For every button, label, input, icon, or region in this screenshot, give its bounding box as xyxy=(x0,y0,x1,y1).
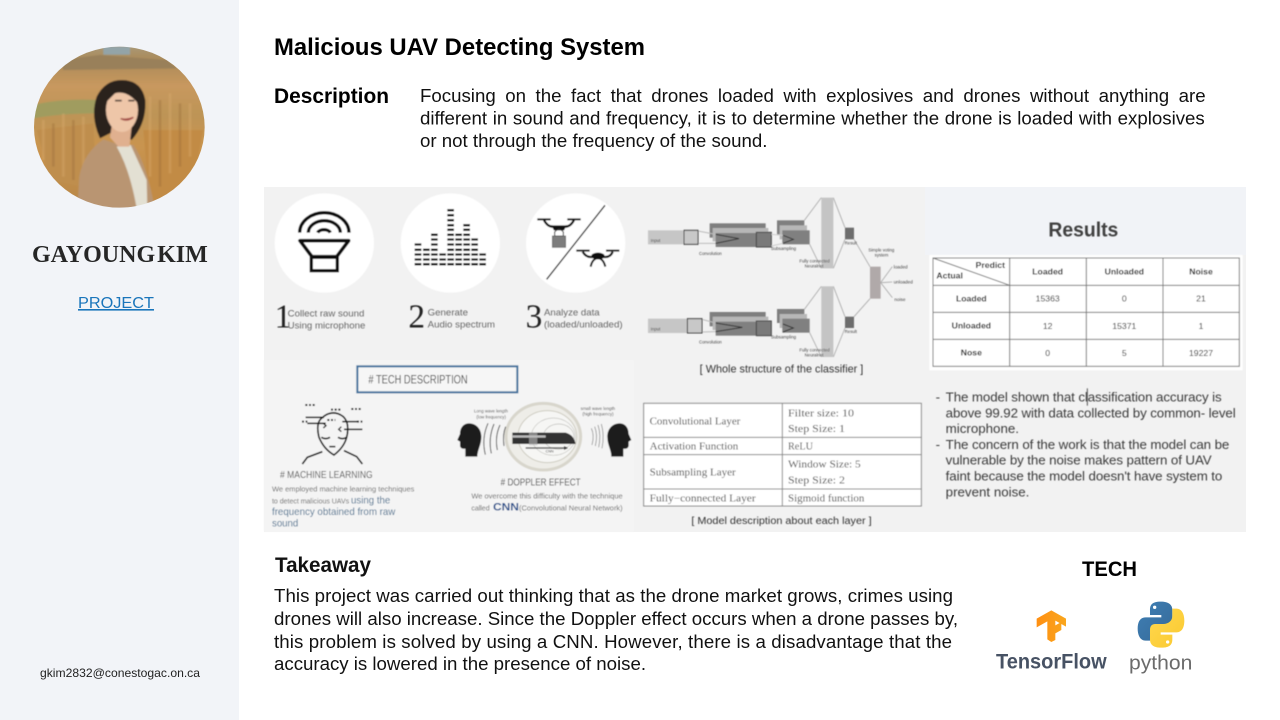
step labels: 3 xyxy=(526,298,542,335)
results heading: Results xyxy=(1048,220,1118,242)
upper branch xyxy=(648,198,854,268)
panel: figures xyxy=(264,187,1246,532)
results notes xyxy=(936,388,1236,499)
confusion matrix: Unloaded xyxy=(952,321,991,331)
results notes: - xyxy=(936,437,940,452)
description text: Focusing on the fact that drones loaded with explosives and drones without anything are xyxy=(420,85,1206,106)
takeaway text: This project was carried out thinking that as the drone market grows, crimes using xyxy=(274,585,953,606)
diagram labels: Subsampling xyxy=(771,334,797,339)
step labels: 2 xyxy=(408,298,425,335)
diagram labels: Fully connected xyxy=(799,259,830,264)
machine learning text: to detect malicious UAVs using the xyxy=(272,495,390,506)
confusion matrix: 19227 xyxy=(1189,348,1213,358)
layer table: Window Size: 5 xyxy=(788,460,861,471)
left head xyxy=(457,423,481,457)
icon: doppler effect: (low frequency) xyxy=(476,414,506,419)
icon: machine learning head xyxy=(302,405,362,464)
neck xyxy=(110,127,132,147)
diagram labels: Convolution xyxy=(699,340,722,345)
results notes: above 99.92 with data collected by common- level xyxy=(946,405,1236,420)
doppler text: # DOPPLER EFFECT xyxy=(501,477,581,488)
icon: doppler effect: CNN xyxy=(546,450,554,454)
confusion matrix: 12 xyxy=(1043,321,1053,331)
diagram labels: system xyxy=(875,253,889,258)
confusion matrix xyxy=(929,255,1243,370)
diagram labels: Fully connected xyxy=(799,347,830,352)
step labels: 1 xyxy=(275,298,291,335)
confusion matrix: 0 xyxy=(1045,348,1050,358)
diagram labels: noise xyxy=(894,297,906,302)
takeaway heading: Takeaway xyxy=(275,553,371,577)
confusion matrix: Loaded xyxy=(1032,267,1063,277)
icon: python logo xyxy=(1129,602,1192,674)
confusion matrix: Noise xyxy=(1189,267,1213,277)
machine learning text xyxy=(272,470,415,530)
diagram labels: unloaded xyxy=(894,280,913,285)
diagram labels: Neuralnet xyxy=(805,264,824,269)
results notes: - xyxy=(936,390,940,405)
machine learning text: sound xyxy=(272,519,298,530)
icon: doppler effect: small wave length xyxy=(581,406,616,411)
results notes: The concern of the work is that the model can be xyxy=(946,437,1229,452)
description text: different in sound and frequency, it is to determine whether the drone is loaded with explosives xyxy=(420,108,1205,128)
email: gkim2832@conestogac.on.ca xyxy=(40,666,200,680)
tech description box: # TECH DESCRIPTION xyxy=(368,373,468,387)
step 3 drones icon xyxy=(526,193,625,293)
right head xyxy=(607,423,631,457)
machine learning text: # MACHINE LEARNING xyxy=(280,470,373,481)
doppler text: CNN xyxy=(493,502,519,514)
doppler text: (Convolutional Neural Network) xyxy=(519,505,623,512)
layer table: Filter size: 10 xyxy=(788,408,854,419)
icon: doppler effect xyxy=(457,403,631,470)
confusion matrix: 5 xyxy=(1122,348,1127,358)
layer table xyxy=(644,403,921,506)
panel: model layer table xyxy=(644,403,921,527)
confusion matrix: Predict xyxy=(976,260,1005,270)
doppler text xyxy=(471,477,623,514)
layer table: Step Size: 1 xyxy=(788,424,845,435)
tech heading: TECH xyxy=(1082,557,1137,581)
layer table: Activation Function xyxy=(650,442,738,453)
cardigan xyxy=(77,139,155,210)
diagram labels: Input xyxy=(651,326,661,331)
diagram labels: Input xyxy=(651,238,661,243)
icon: doppler effect: (high frequency) xyxy=(582,411,614,416)
layer table: Subsampling Layer xyxy=(650,468,736,479)
title: Malicious UAV Detecting System xyxy=(274,34,645,61)
layer table: Fully−connected Layer xyxy=(650,493,756,504)
description text: or not through the frequency of the sound. xyxy=(420,130,767,151)
machine learning text: We employed machine learning techniques xyxy=(272,487,415,494)
layer table: ReLU xyxy=(788,442,813,453)
results notes: The model shown that classification accuracy is xyxy=(946,390,1222,405)
diagram labels: Simple voting xyxy=(868,247,895,252)
results notes: microphone. xyxy=(946,421,1019,436)
confusion matrix: Unloaded xyxy=(1105,267,1144,277)
confusion matrix: Nose xyxy=(961,348,982,358)
confusion matrix: 1 xyxy=(1199,321,1204,331)
lower branch xyxy=(648,286,854,357)
confusion matrix: 21 xyxy=(1196,294,1206,304)
machine learning text: frequency obtained from raw xyxy=(272,507,395,518)
confusion matrix: 15363 xyxy=(1036,294,1060,304)
step labels xyxy=(275,298,623,335)
face xyxy=(106,88,138,132)
icon: doppler effect: Long wave length xyxy=(474,409,509,414)
doppler text: We overcome this difficulty with the technique xyxy=(471,493,623,501)
panel: process steps xyxy=(275,193,625,335)
panel: results xyxy=(929,220,1243,370)
step labels: (loaded/unloaded) xyxy=(544,320,623,330)
project link: PROJECT xyxy=(78,295,154,312)
name: GAYOUNG KIM xyxy=(32,242,208,268)
step 1 microphone icon xyxy=(275,193,374,293)
step labels: Using microphone xyxy=(288,320,365,330)
profile photo xyxy=(30,43,210,213)
layer table: Convolutional Layer xyxy=(650,416,741,427)
shirt xyxy=(117,145,147,208)
step 2 spectrum icon xyxy=(401,193,500,293)
diagram labels: Neuralnet xyxy=(805,352,824,357)
results notes: faint because the model doesn't have system to xyxy=(946,468,1222,483)
results notes: vulnerable by the noise makes pattern of UAV xyxy=(946,453,1212,468)
step labels: Collect raw sound xyxy=(288,309,364,319)
layer table caption: [ Model description about each layer ] xyxy=(691,516,872,527)
takeaway text: this problem is solved by using a CNN. However, there is a disadvantage that the xyxy=(274,631,952,652)
icon: tensorflow logo: TensorFlow xyxy=(996,649,1107,673)
panel: classifier structure xyxy=(648,198,913,376)
classifier diagram xyxy=(648,198,913,357)
takeaway text xyxy=(274,585,958,674)
takeaway text: accuracy is lowered in the presence of noise. xyxy=(274,653,646,674)
sidebar xyxy=(0,0,239,720)
hair xyxy=(94,80,145,140)
diagram labels: Convolution xyxy=(699,251,722,256)
confusion matrix: 0 xyxy=(1122,294,1127,304)
classifier caption: [ Whole structure of the classifier ] xyxy=(700,364,863,376)
results notes: prevent noise. xyxy=(946,484,1029,499)
description text xyxy=(420,85,1206,151)
description heading: Description xyxy=(274,84,389,108)
layer table: Step Size: 2 xyxy=(788,475,845,486)
takeaway text: drones will also increase. Since the Doppler effect occurs when a drone passes by, xyxy=(274,608,958,629)
tech description box xyxy=(357,366,517,392)
step labels: Generate xyxy=(428,308,468,318)
diagram labels: Result xyxy=(845,329,858,334)
confusion matrix: Loaded xyxy=(956,294,987,304)
panel: tech description xyxy=(264,360,634,532)
diagram labels xyxy=(651,238,913,357)
diagram labels: Subsampling xyxy=(771,246,797,251)
diagram labels: loaded xyxy=(894,264,908,269)
icon: tensorflow logo xyxy=(996,610,1107,673)
step labels: Audio spectrum xyxy=(428,320,495,330)
icon: python logo: python xyxy=(1129,651,1192,674)
diagram labels: Result xyxy=(845,241,858,246)
step labels: Analyze data xyxy=(544,308,600,318)
confusion matrix: 15371 xyxy=(1112,321,1137,331)
layer table: Sigmoid function xyxy=(788,493,864,504)
confusion matrix: Actual xyxy=(936,271,963,281)
doppler text: called xyxy=(471,505,490,512)
